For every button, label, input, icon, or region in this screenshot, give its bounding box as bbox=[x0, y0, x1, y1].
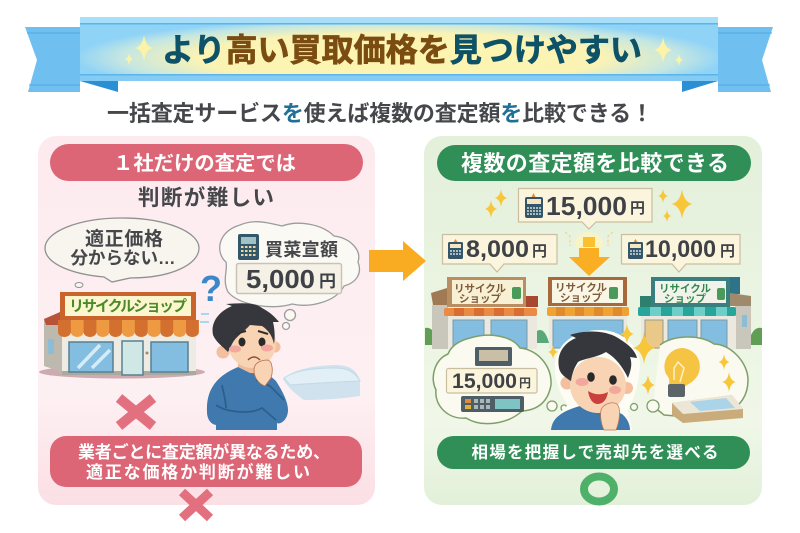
shop sign: リサイクルショップ bbox=[69, 298, 187, 315]
price tag: 8,000 yen: 円 bbox=[532, 243, 547, 260]
shop sign bbox=[60, 292, 196, 320]
title ribbon banner bbox=[25, 17, 773, 92]
illustration: appraisal item tray bbox=[283, 365, 360, 400]
ribbon left tail bbox=[25, 27, 80, 92]
heading pill bbox=[50, 144, 363, 181]
illustration: happy man bbox=[551, 330, 640, 430]
speech bubble: unsure of price bbox=[45, 218, 199, 288]
price tag: 8,000 yen bbox=[442, 234, 557, 272]
shop sign bbox=[447, 277, 526, 307]
shop awning bbox=[58, 320, 199, 337]
icon: calculator bbox=[628, 239, 643, 259]
arrow between panels bbox=[369, 241, 426, 281]
price tag: 10,000 yen bbox=[622, 234, 740, 272]
shop sign: ショップ bbox=[664, 293, 706, 305]
price box: 円 bbox=[319, 272, 336, 291]
icon: calculator bbox=[448, 239, 463, 259]
price tag: 10,000 yen: 10,000 bbox=[645, 236, 716, 263]
sparkles top bbox=[485, 189, 692, 222]
calculator device bbox=[461, 396, 524, 412]
shop sign: ショップ bbox=[459, 293, 501, 305]
awning bbox=[444, 308, 537, 316]
price box: 15,000 bbox=[452, 370, 517, 393]
price tag: 15,000 yen: 円 bbox=[630, 200, 645, 217]
thought cloud: quoted price bbox=[220, 222, 359, 330]
conclusion pill: 相場を把握しで売却先を選べる bbox=[472, 443, 718, 462]
illustration: shop 2 bbox=[537, 277, 629, 349]
sparkles around man bbox=[548, 324, 736, 395]
price tag: 8,000 yen: 8,000 bbox=[466, 236, 529, 263]
cross mark bottom bbox=[182, 492, 210, 518]
awning bbox=[638, 307, 736, 316]
shop sign: リサイクル bbox=[454, 283, 506, 295]
thought cloud: 15,000 yen comparison bbox=[433, 335, 551, 424]
ribbon right tail bbox=[718, 27, 773, 92]
panel: multiple appraisals (right) bbox=[424, 136, 762, 505]
shop sign bbox=[651, 277, 730, 307]
speech bubble: unsure of price: 適正価格 bbox=[85, 228, 163, 250]
awning bbox=[547, 307, 629, 316]
price tag: 15,000 yen: 15,000 bbox=[546, 191, 627, 221]
icon: calculator bbox=[238, 234, 259, 260]
icon: calculator bbox=[525, 193, 543, 218]
thought cloud: idea bbox=[547, 337, 748, 423]
price box: 5,000 bbox=[246, 264, 315, 294]
speech bubble: unsure of price: 分からない… bbox=[70, 248, 176, 268]
heading pill: 複数の査定額を比較できる bbox=[461, 151, 729, 176]
cross mark bbox=[119, 398, 153, 426]
price tag: 15,000 yen bbox=[518, 188, 652, 229]
conclusion pill bbox=[437, 436, 750, 469]
circle mark bbox=[584, 476, 614, 502]
price tag: 10,000 yen: 円 bbox=[720, 243, 735, 260]
title text: より高い買取価格を見つけやすい bbox=[162, 32, 642, 68]
price box: 円 bbox=[519, 376, 531, 390]
illustration: worried man bbox=[207, 303, 288, 430]
subtitle: 一括査定サービスを使えば複数の査定額を比較できる！ bbox=[107, 101, 653, 126]
arrow: pointing down to best shop bbox=[565, 232, 613, 276]
panel: single appraisal (left) bbox=[38, 136, 375, 518]
sparkles around title bbox=[125, 35, 683, 66]
heading pill: １社だけの査定では bbox=[113, 152, 296, 175]
icon: question mark: ? bbox=[200, 268, 222, 309]
shop sign: ショップ bbox=[560, 292, 602, 304]
heading pill bbox=[437, 145, 751, 181]
price box bbox=[446, 368, 537, 393]
callout: conclusion: 業者ごとに査定額が異なるため、 bbox=[78, 442, 330, 462]
item box bbox=[672, 395, 743, 423]
illustration: recycle shop bbox=[39, 292, 205, 378]
illustration: shop 1 bbox=[425, 277, 538, 349]
callout: conclusion: 適正な価格か判断が難しい bbox=[86, 462, 310, 482]
icon: light bulb bbox=[664, 348, 700, 397]
illustration: shop 3 bbox=[638, 277, 762, 349]
display device bbox=[475, 347, 512, 366]
subheading: 判断が難しい bbox=[138, 185, 274, 210]
price box bbox=[236, 264, 342, 294]
thought cloud: quoted price: 買菜宣額 bbox=[265, 240, 338, 260]
shop sign bbox=[548, 277, 627, 306]
shop sign: リサイクル bbox=[555, 282, 607, 294]
callout: conclusion bbox=[50, 436, 362, 487]
shop sign: リサイクル bbox=[659, 283, 711, 295]
